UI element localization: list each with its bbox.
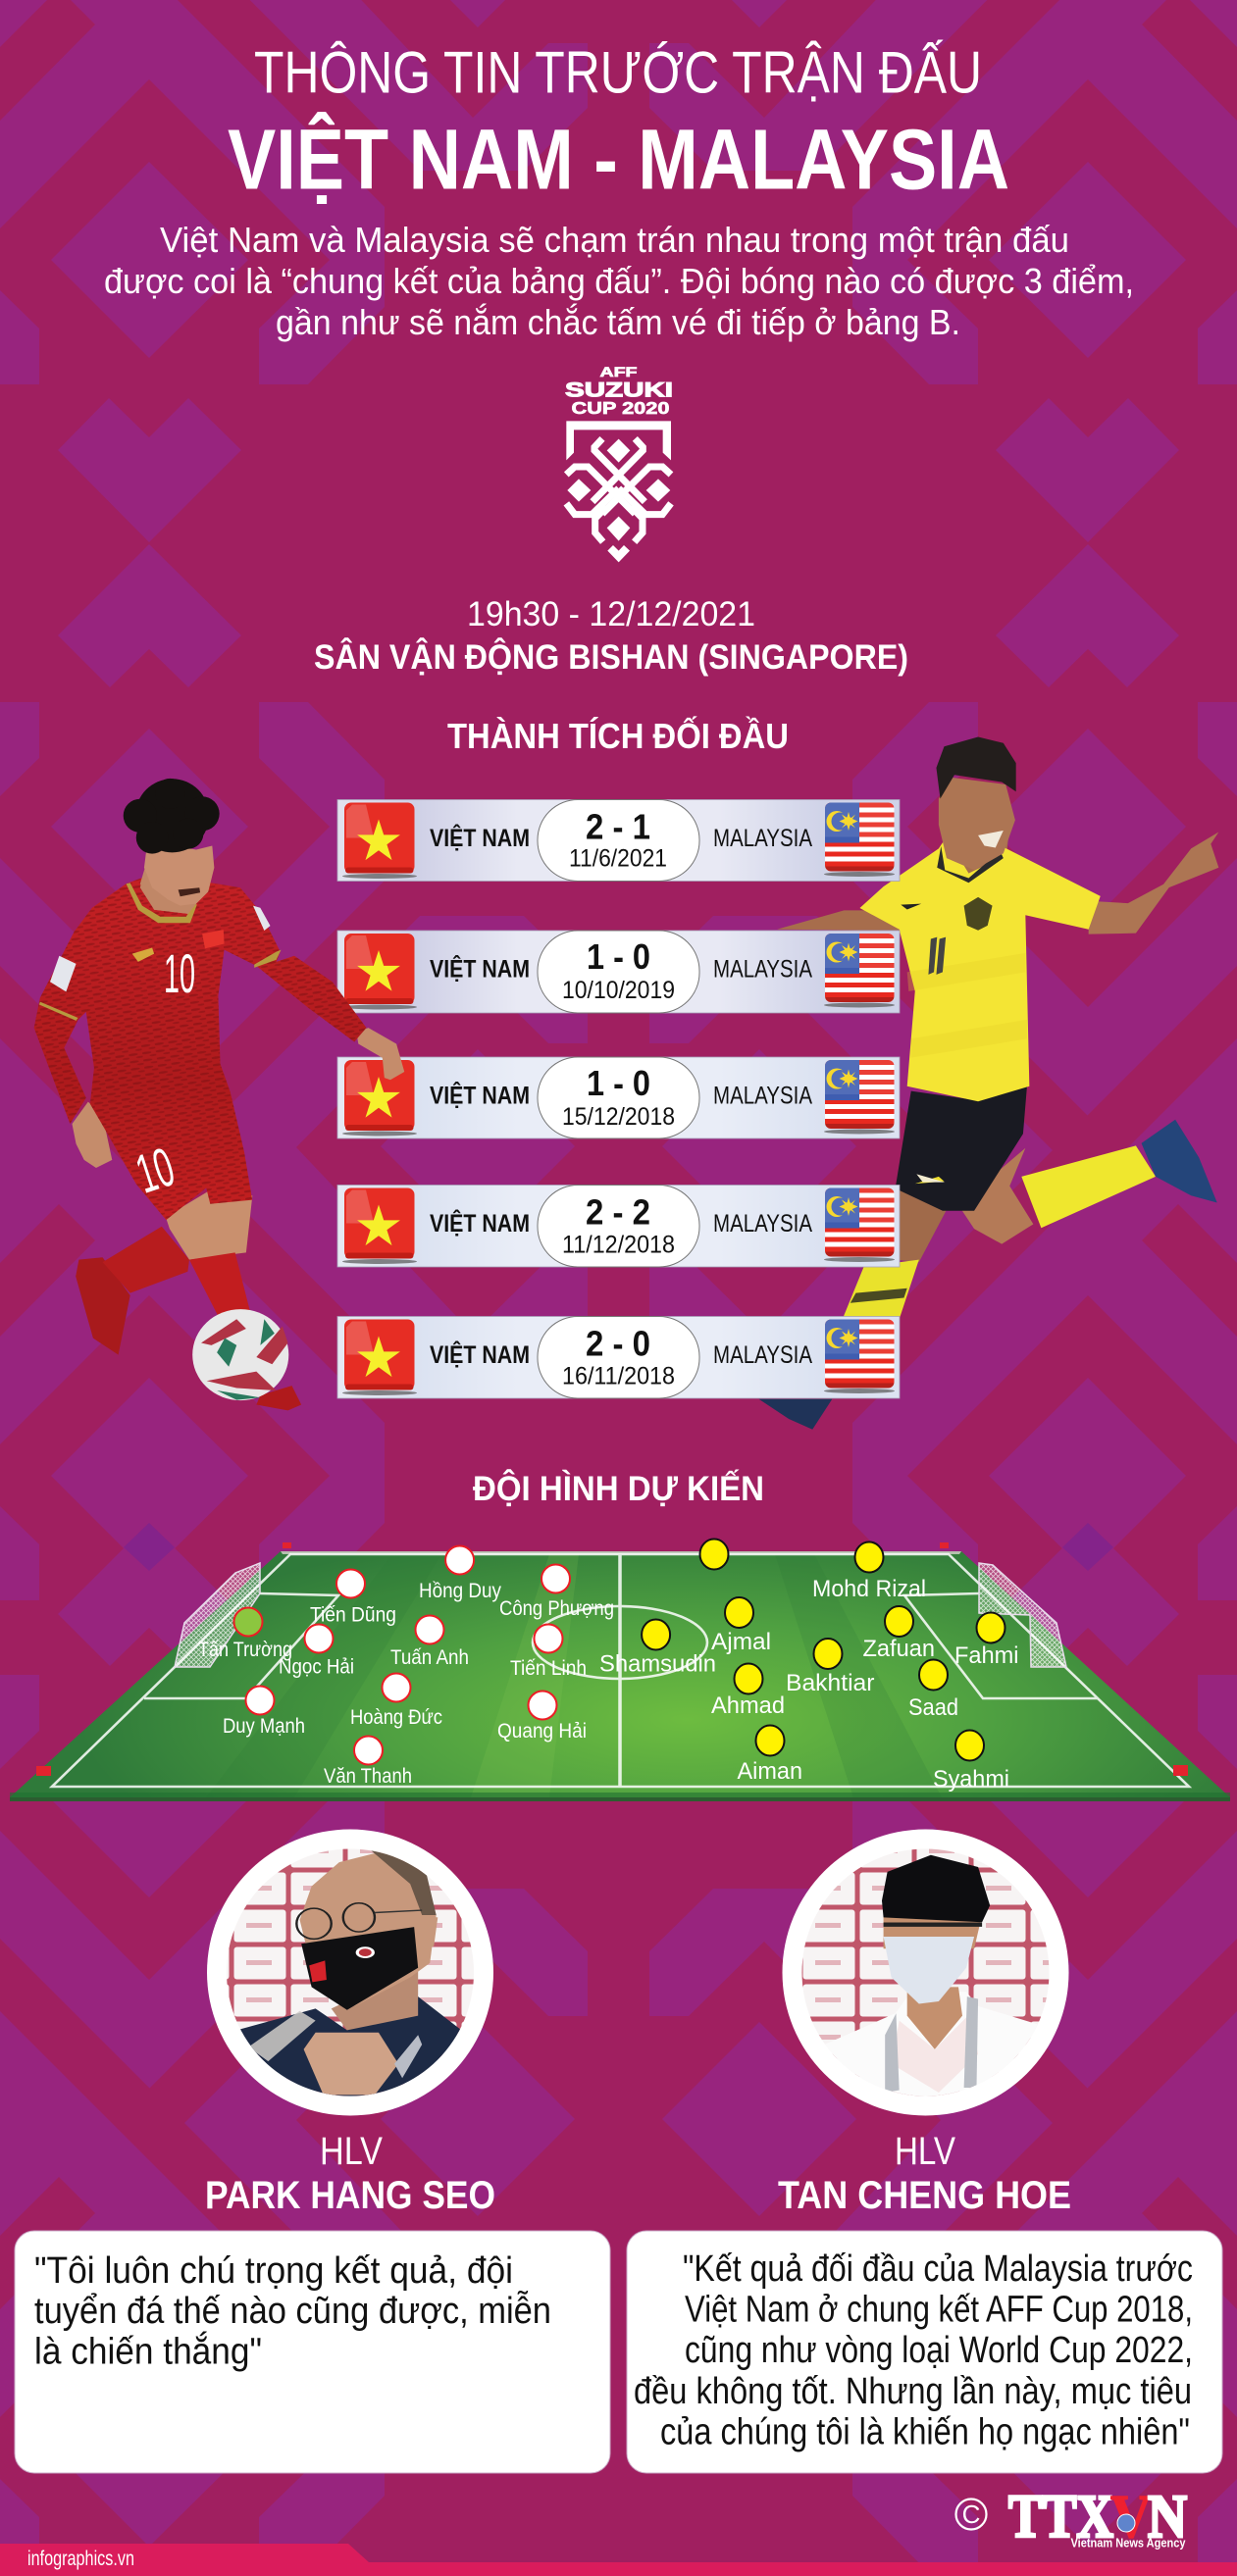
stadium: SÂN VẬN ĐỘNG BISHAN (SINGAPORE) <box>314 637 908 677</box>
quote box: Tan Cheng Hoe <box>627 2231 1222 2473</box>
TTXVN logo: N <box>1148 2484 1187 2551</box>
Viet Nam lineup: Tuấn Anh <box>390 1646 469 1669</box>
footer band <box>0 2544 1237 2576</box>
coach name: Tan Cheng Hoe: TAN CHENG HOE <box>778 2174 1071 2217</box>
intro paragraph <box>104 220 1134 342</box>
Malaysia lineup: Aiman <box>738 1758 802 1785</box>
Viet Nam lineup: Hồng Duy <box>419 1580 501 1602</box>
coach name: Park Hang Seo: HLV <box>320 2130 383 2173</box>
match row: 15/12/2018 <box>337 1057 900 1138</box>
Viet Nam player photo: 10 <box>129 1136 181 1205</box>
AFF Suzuki Cup 2020 logo <box>565 364 673 562</box>
match row: 11/12/2018: VIỆT NAM <box>430 1208 530 1237</box>
quote box: Park Hang Seo: là chiến thắng" <box>34 2330 262 2373</box>
quote box: Park Hang Seo: "Tôi luôn chú trọng kết quả, đội <box>34 2250 513 2292</box>
match row: 11/12/2018 <box>337 1185 900 1267</box>
Viet Nam lineup: Tiến Linh <box>510 1657 587 1680</box>
match row: 10/10/2019: 10/10/2019 <box>562 977 675 1004</box>
Malaysia lineup: Fahmi <box>954 1642 1018 1669</box>
Viet Nam lineup: Quang Hải <box>497 1720 587 1743</box>
Malaysia lineup: Saad <box>908 1694 958 1721</box>
quote box: Park Hang Seo: tuyển đá thế nào cũng được, miễn <box>34 2290 551 2332</box>
heading: expected lineups: ĐỘI HÌNH DỰ KIẾN <box>473 1469 764 1508</box>
title: Viet Nam - Malaysia: VIỆT NAM - MALAYSIA <box>228 112 1009 208</box>
Malaysia lineup <box>599 1540 1018 1793</box>
match row: 16/11/2018: 16/11/2018 <box>562 1363 675 1390</box>
match row: 15/12/2018: 15/12/2018 <box>562 1103 675 1131</box>
Malaysia lineup: Ahmad <box>711 1692 785 1719</box>
coach photo: Tan Cheng Hoe <box>783 1830 1069 2116</box>
AFF Suzuki Cup 2020 logo: AFF <box>600 364 638 379</box>
match row: 15/12/2018: 1 - 0 <box>587 1063 650 1103</box>
match row: 11/6/2021: 2 - 1 <box>586 806 650 847</box>
TTXVN logo: V <box>1110 2484 1152 2551</box>
Viet Nam lineup: Tiến Dũng <box>310 1604 396 1626</box>
match row: 11/12/2018: 2 - 2 <box>586 1192 650 1232</box>
intro paragraph: Việt Nam và Malaysia sẽ chạm trán nhau trong một trận đấu <box>160 220 1069 260</box>
Viet Nam player photo: 10 <box>164 942 195 1004</box>
Malaysia lineup: Bakhtiar <box>786 1670 875 1696</box>
match row: 11/6/2021 <box>337 800 900 881</box>
Malaysia lineup: Ajmal <box>711 1629 771 1655</box>
goal right <box>979 1563 1066 1667</box>
match row: 10/10/2019: MALAYSIA <box>713 955 812 983</box>
quote box: Park Hang Seo <box>15 2231 610 2473</box>
AFF Suzuki Cup 2020 logo: CUP 2020 <box>571 398 670 418</box>
title line: pre-match info: THÔNG TIN TRƯỚC TRẬN ĐẤU <box>254 39 982 106</box>
coach name: Tan Cheng Hoe: HLV <box>895 2130 955 2173</box>
TTXVN logo: TTX <box>1008 2484 1113 2551</box>
pitch surface <box>10 1551 1230 1801</box>
match row: 11/6/2021: MALAYSIA <box>713 825 812 852</box>
Malaysia lineup: Mohd Rizal <box>812 1576 926 1602</box>
match row: 16/11/2018: 2 - 0 <box>586 1324 650 1363</box>
Viet Nam lineup: Hoàng Đức <box>350 1706 442 1729</box>
Viet Nam lineup: Ngọc Hải <box>279 1655 354 1679</box>
goal left <box>175 1563 260 1667</box>
match time: 19h30 - 12/12/2021 <box>467 595 755 633</box>
match row: 10/10/2019 <box>337 931 900 1013</box>
TTXVN logo: Vietnam News Agency <box>1071 2536 1186 2550</box>
match row: 16/11/2018: VIỆT NAM <box>430 1339 530 1369</box>
coach name: Park Hang Seo: PARK HANG SEO <box>205 2174 495 2217</box>
copyright symbol: C <box>962 2500 980 2529</box>
Viet Nam lineup <box>198 1545 614 1788</box>
footer source text: infographics.vn <box>27 2548 134 2570</box>
match row: 11/12/2018: 11/12/2018 <box>562 1232 675 1259</box>
Viet Nam lineup: Công Phượng <box>499 1597 614 1620</box>
match row: 16/11/2018 <box>337 1316 900 1398</box>
match row: 16/11/2018: MALAYSIA <box>713 1341 812 1369</box>
intro paragraph: gần như sẽ nắm chắc tấm vé đi tiếp ở bảng B. <box>276 302 960 342</box>
football pitch with lineups <box>10 1540 1230 1801</box>
coach name: Tan Cheng Hoe <box>778 2130 1071 2217</box>
coach photo: Park Hang Seo <box>207 1830 493 2116</box>
Viet Nam player photo <box>34 779 404 1410</box>
match row: 11/6/2021: 11/6/2021 <box>569 845 667 873</box>
Viet Nam lineup: Tấn Trường <box>198 1639 292 1661</box>
match row: 10/10/2019: 1 - 0 <box>587 936 650 977</box>
match row: 15/12/2018: MALAYSIA <box>713 1083 812 1110</box>
Malaysia player photo <box>759 737 1218 1430</box>
heading: head to head: THÀNH TÍCH ĐỐI ĐẦU <box>447 715 789 756</box>
Viet Nam lineup: Văn Thanh <box>324 1765 412 1788</box>
match row: 15/12/2018: VIỆT NAM <box>430 1081 530 1110</box>
match row: 11/12/2018: MALAYSIA <box>713 1210 812 1237</box>
copyright symbol <box>955 2499 987 2530</box>
match row: 11/6/2021: VIỆT NAM <box>430 823 530 852</box>
Malaysia lineup: Syahmi <box>933 1766 1009 1793</box>
corner flags <box>36 1542 1188 1776</box>
panel: head to head results <box>337 800 900 1398</box>
Malaysia lineup: Shamsudin <box>599 1651 716 1677</box>
coach name: Park Hang Seo <box>205 2130 495 2217</box>
Viet Nam lineup: Duy Mạnh <box>223 1715 305 1738</box>
match row: 10/10/2019: VIỆT NAM <box>430 953 530 983</box>
Malaysia lineup: Zafuan <box>863 1636 935 1662</box>
AFF Suzuki Cup 2020 logo: SUZUKI <box>565 379 673 402</box>
intro paragraph: được coi là “chung kết của bảng đấu”. Đội bóng nào có được 3 điểm, <box>104 261 1134 301</box>
pitch lines <box>52 1554 1189 1787</box>
